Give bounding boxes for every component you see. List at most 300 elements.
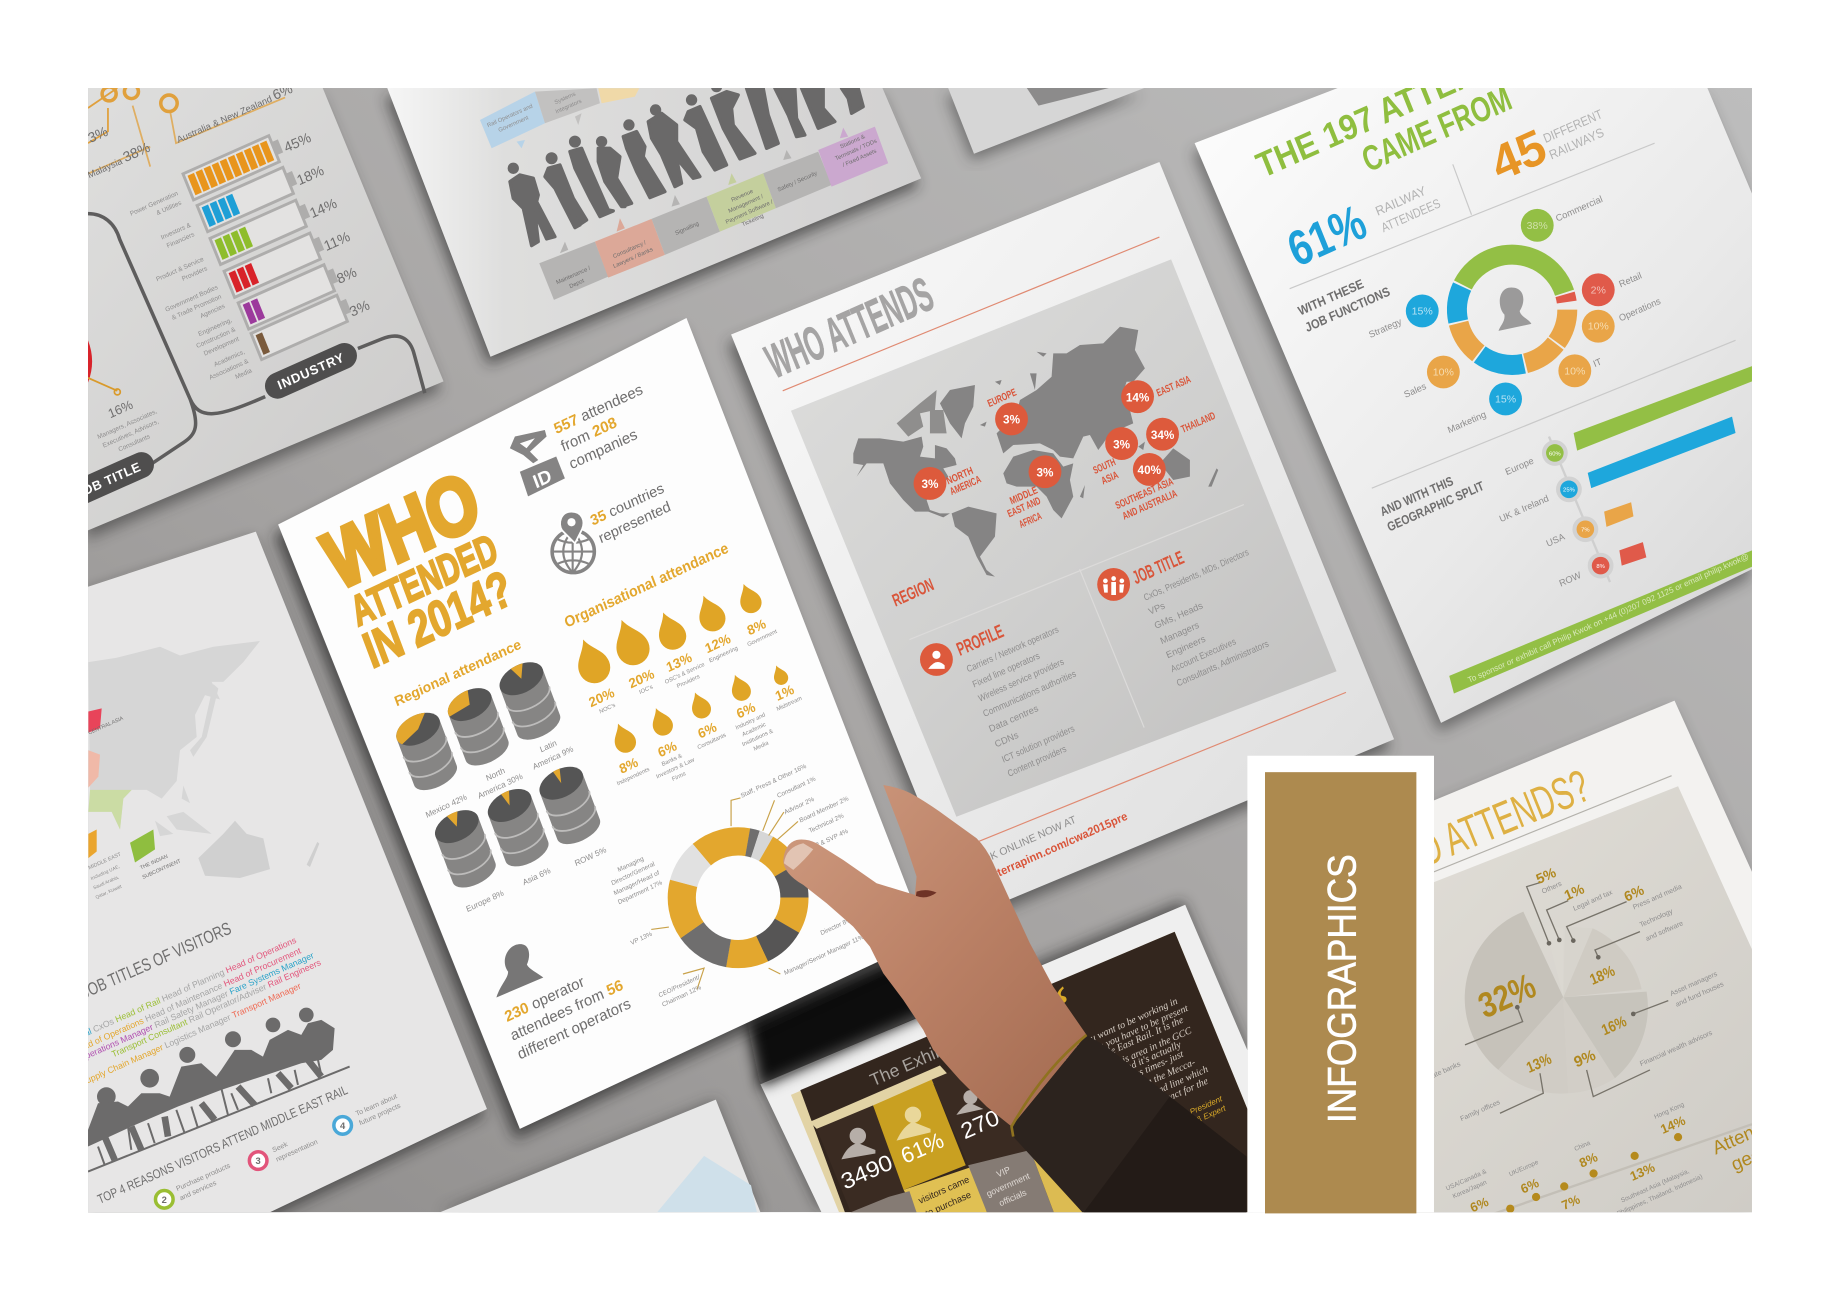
regional timeline: China bbox=[1573, 1139, 1592, 1153]
map labels: SUBCONTINENT bbox=[142, 858, 183, 881]
panel: bottom centre small page bbox=[440, 1100, 760, 1212]
red pie fragment bbox=[88, 340, 92, 383]
photo background bbox=[88, 88, 1752, 1212]
speech boxes bbox=[480, 88, 888, 300]
drop labels: Institutions & bbox=[741, 728, 774, 748]
geographic split labels: ROW bbox=[1557, 569, 1583, 589]
donut labels bbox=[611, 763, 865, 1009]
battery percentages: 18% bbox=[294, 162, 327, 188]
donut labels: Chairman 12% bbox=[661, 984, 703, 1009]
box labels: Stations & bbox=[839, 134, 866, 150]
world map bbox=[853, 327, 1218, 577]
barrel labels: Asia 6% bbox=[521, 866, 552, 887]
map region labels: ASIA bbox=[1100, 469, 1121, 487]
battery labels: Power Generation bbox=[129, 190, 179, 218]
battery 1 power generation bbox=[183, 133, 286, 200]
battery labels: Providers bbox=[181, 265, 208, 283]
donut labels: Director/General bbox=[611, 861, 656, 887]
battery 4 government bbox=[224, 230, 327, 297]
quote: If you want to be working in bbox=[1072, 996, 1179, 1052]
battery percentages bbox=[286, 133, 370, 316]
grey panel bbox=[791, 259, 1337, 817]
job title block: Managers bbox=[1158, 619, 1201, 646]
pie labels: and software bbox=[1645, 920, 1684, 943]
reason 3: 3 bbox=[256, 1156, 261, 1166]
title: ATTENDED bbox=[345, 525, 504, 635]
battery 3 product and service bbox=[210, 197, 313, 265]
coloured job titles: Head of Operations Head of Maintenance Head of Procurement bbox=[72, 945, 303, 1056]
stat columns bbox=[810, 1047, 1085, 1212]
job title block: Consultants, Administrators bbox=[1175, 637, 1270, 688]
job title block: Account Executives bbox=[1169, 635, 1238, 674]
map region labels: THAILAND bbox=[1179, 410, 1217, 436]
meeting silhouettes bbox=[88, 1008, 350, 1172]
coloured job titles: Supply Chain Manager Logistics Manager Transport Manager bbox=[79, 981, 302, 1088]
profile block: Communications authorities bbox=[981, 667, 1078, 719]
panel: silhouettes brochure page bbox=[385, 83, 921, 365]
job functions heading: JOB FUNCTIONS bbox=[1303, 284, 1392, 335]
icon: globe and pin bbox=[552, 512, 594, 573]
barrel: mexico bbox=[392, 706, 461, 796]
heading: titles of visitors: JOB TITLES OF VISITORS bbox=[78, 918, 234, 1002]
barrel: row bbox=[535, 760, 604, 850]
battery labels: Engineering, bbox=[197, 317, 233, 338]
donut labels: Staff, Press & Other 16% bbox=[740, 763, 808, 800]
people silhouettes bbox=[509, 83, 863, 246]
map markers: 40% bbox=[1138, 464, 1162, 477]
stat 557 attendees: from 208 bbox=[559, 414, 620, 456]
box labels: Payment Software / bbox=[725, 199, 774, 226]
bubbles: 15% bbox=[1495, 394, 1516, 406]
barrel labels: Europe 8% bbox=[465, 888, 505, 914]
reason 2: Purchase products bbox=[175, 1162, 232, 1193]
battery labels: Product & Service bbox=[155, 256, 205, 283]
battery labels: & Trade Promotion bbox=[171, 293, 223, 322]
regional timeline: Southeast Asia (Malaysia, bbox=[1620, 1168, 1691, 1205]
stat 557 attendees bbox=[552, 381, 646, 473]
pie chart bbox=[1465, 883, 1668, 1113]
stat 35 countries: 35 countries bbox=[588, 481, 666, 529]
hand holding the brochure bbox=[783, 785, 1087, 1127]
geographic split bars: 7% bbox=[1581, 528, 1590, 534]
battery percentages: 14% bbox=[307, 195, 339, 221]
stat 61 percent: ATTENDEES bbox=[1379, 195, 1443, 235]
pie labels: Press and media bbox=[1632, 883, 1683, 911]
quote: Medina and line which bbox=[1121, 1064, 1210, 1112]
label: gold infographics tab bbox=[1265, 772, 1416, 1213]
drop percentages: 8% bbox=[617, 754, 640, 777]
barrel: latin america bbox=[495, 656, 564, 746]
map labels: Malaysia 38% bbox=[84, 139, 153, 181]
donut labels: Consultant 1% bbox=[776, 775, 817, 800]
drops bbox=[568, 580, 790, 756]
green sponsor banner: To sponsor or exhibit call Philip Kwok on +44 (0)207 092 1125 or email philip.kwok@ bbox=[1467, 552, 1750, 685]
box labels: Lawyers / Banks bbox=[613, 247, 654, 270]
barrel labels: Latin bbox=[539, 738, 558, 754]
battery labels bbox=[129, 190, 253, 382]
label: gold infographics tab: INFOGRAPHICS bbox=[1320, 854, 1364, 1123]
pie percentages: 18% bbox=[1587, 962, 1618, 989]
map labels: MIDDLE EAST bbox=[88, 851, 123, 871]
pie percentages: 13% bbox=[1524, 1050, 1554, 1077]
map region labels bbox=[945, 373, 1217, 531]
stat 230 operators: 230 operator bbox=[502, 973, 587, 1026]
icon: persons bbox=[841, 1090, 983, 1159]
quote: & Expert bbox=[1195, 1103, 1228, 1125]
map labels: CENTRAL ASIA bbox=[88, 715, 125, 736]
box labels: Management / bbox=[728, 194, 765, 215]
map of Asia bbox=[88, 641, 319, 878]
pie percentages: 9% bbox=[1572, 1046, 1598, 1071]
regional timeline: geography bbox=[1728, 1119, 1817, 1175]
geographic split bars: 60% bbox=[1549, 451, 1561, 457]
box labels: Systems bbox=[554, 91, 577, 106]
geographic split labels: UK & Ireland bbox=[1497, 492, 1550, 524]
map region labels: SOUTH bbox=[1091, 456, 1117, 477]
map region labels: AMERICA bbox=[948, 473, 983, 498]
battery labels: Government Bodies bbox=[164, 284, 219, 314]
box labels bbox=[486, 91, 878, 290]
geographic split bars bbox=[1542, 366, 1752, 582]
quote: Vice President bbox=[1172, 1094, 1224, 1124]
bubbles: 10% bbox=[1564, 365, 1585, 377]
drop labels: Independents bbox=[616, 767, 651, 787]
box labels: Integrators bbox=[555, 99, 583, 116]
job title stat: 16% bbox=[106, 396, 135, 421]
drop percentages: 12% bbox=[703, 631, 733, 656]
region heading: REGION bbox=[889, 574, 937, 610]
box labels: Maintenance / bbox=[556, 266, 592, 286]
icon: id badge bbox=[510, 430, 565, 496]
donut labels: Director 8% bbox=[820, 916, 853, 937]
barrel labels: North bbox=[485, 766, 507, 783]
reason 4 bbox=[334, 1093, 402, 1134]
icon: id badge: ID bbox=[530, 465, 554, 492]
pie labels: Family offices bbox=[1459, 1099, 1502, 1123]
map region labels: AFRICA bbox=[1018, 510, 1044, 531]
drop labels: NOC's bbox=[599, 703, 616, 715]
drop labels: Firms bbox=[671, 771, 687, 783]
quote: it's famous times- just bbox=[1102, 1049, 1185, 1094]
job title block: JOB TITLE bbox=[1130, 547, 1187, 588]
battery 2 investors bbox=[197, 164, 300, 232]
stat 35 countries: represented bbox=[597, 499, 673, 547]
stat 61 percent: RAILWAY bbox=[1373, 183, 1428, 219]
geographic split heading: AND WITH THIS bbox=[1378, 473, 1456, 519]
bubbles: 10% bbox=[1588, 321, 1609, 333]
regional timeline bbox=[1434, 1101, 1817, 1235]
map markers: 3% bbox=[922, 478, 939, 491]
profile block: CDNs bbox=[993, 729, 1020, 749]
battery labels: Investors & bbox=[160, 222, 193, 241]
battery labels: Financiers bbox=[166, 231, 196, 250]
barrel labels: Mexico 42% bbox=[424, 793, 468, 820]
job title stat: Executives, Advisors, bbox=[102, 418, 160, 450]
quote: at Middle East Rail. It is the bbox=[1078, 1014, 1186, 1071]
quote bbox=[1037, 976, 1228, 1125]
title: WHO bbox=[313, 454, 491, 606]
bubbles: 2% bbox=[1591, 284, 1606, 296]
quote: this region you have to be present bbox=[1063, 1003, 1190, 1068]
stat 35 countries bbox=[588, 481, 673, 547]
barrel: europe bbox=[431, 804, 499, 894]
regional timeline: Hong Kong bbox=[1653, 1101, 1686, 1121]
stat 45 railways bbox=[1483, 106, 1606, 192]
geographic split labels: USA bbox=[1544, 530, 1567, 549]
stats text bbox=[837, 1105, 1032, 1219]
donut labels: Technical 2% bbox=[808, 812, 845, 835]
footer booking text: BOOK ONLINE NOW AT bbox=[967, 814, 1078, 872]
profile block: ICT solution providers bbox=[1000, 722, 1076, 765]
drop labels: Government bbox=[747, 629, 778, 648]
battery labels: & Utilities bbox=[155, 200, 183, 217]
drop percentages: 6% bbox=[734, 699, 757, 722]
map labels: Qatar, Kuwait bbox=[95, 883, 123, 900]
barrel labels bbox=[424, 738, 608, 914]
box labels: Consultancy / bbox=[612, 240, 647, 260]
map labels bbox=[88, 715, 183, 900]
profile block: Fixed line operators bbox=[971, 650, 1041, 690]
map labels: Saudi Arabia, bbox=[92, 874, 120, 890]
donut labels: Board Member 2% bbox=[799, 795, 850, 824]
drop labels: Consultants bbox=[697, 733, 727, 751]
sleeve cuff bbox=[1012, 1035, 1247, 1213]
bubble labels: IT bbox=[1591, 355, 1603, 369]
box labels: Government bbox=[498, 115, 530, 134]
map markers: 14% bbox=[1126, 391, 1150, 404]
map labels: 3% bbox=[85, 123, 111, 146]
regional timeline: Attendees bbox=[1709, 1105, 1794, 1158]
bubble labels: Marketing bbox=[1446, 408, 1488, 435]
profile block: Data centres bbox=[987, 702, 1040, 734]
box labels: Signalling bbox=[675, 221, 700, 237]
pill: job title: JOB TITLE bbox=[73, 459, 143, 501]
map labels bbox=[88, 88, 292, 178]
reason 3: Seek bbox=[272, 1141, 289, 1154]
bubble labels: Strategy bbox=[1367, 315, 1403, 340]
pie percentages: 16% bbox=[1599, 1013, 1629, 1039]
regional timeline: USA/Canada & bbox=[1445, 1168, 1488, 1192]
icon: operator person bbox=[496, 944, 543, 997]
heading: attendees came from: CAME FROM bbox=[1357, 79, 1517, 180]
quote: and it's actually bbox=[1121, 1039, 1183, 1075]
battery 6 academics bbox=[251, 292, 354, 360]
barrel: north america bbox=[444, 681, 512, 772]
job title block: GMs, Heads bbox=[1152, 599, 1205, 631]
drop labels: OSC's & Service bbox=[664, 662, 706, 686]
battery labels: Construction & bbox=[195, 326, 237, 350]
regional timeline: 6% bbox=[1468, 1194, 1491, 1215]
drop percentages: 6% bbox=[656, 738, 679, 760]
profile block: PROFILE bbox=[954, 620, 1006, 660]
donut labels: Advisor 2% bbox=[783, 796, 816, 816]
stats text: government bbox=[985, 1170, 1032, 1199]
drop percentages: 13% bbox=[664, 650, 694, 675]
box labels: Rail Operators and bbox=[486, 104, 534, 129]
geographic split bars: 25% bbox=[1563, 488, 1575, 494]
battery percentages: 11% bbox=[321, 228, 353, 254]
stat 45 railways: RAILWAYS bbox=[1547, 124, 1606, 162]
quote: biggest show in this area in the GCC bbox=[1055, 1025, 1194, 1095]
donut labels: CEO/President/ bbox=[658, 974, 701, 999]
stat 230 operators: attendees from 56 bbox=[508, 977, 626, 1045]
map region labels: EAST AND bbox=[1006, 495, 1043, 520]
bubbles: 10% bbox=[1433, 367, 1454, 379]
drop percentages: 8% bbox=[745, 616, 768, 638]
job title block bbox=[1097, 546, 1270, 688]
label: white frame bbox=[1247, 756, 1434, 1212]
quote: the contract for the bbox=[1136, 1075, 1210, 1117]
donut labels: Managing bbox=[617, 855, 645, 874]
box labels: Terminals / TODs bbox=[835, 138, 878, 162]
pie labels: Legal and tax bbox=[1572, 889, 1614, 913]
bubbles bbox=[1406, 209, 1615, 415]
stats text: 61% bbox=[897, 1127, 948, 1169]
battery labels: Associations & bbox=[208, 358, 250, 382]
reason 4: To learn about bbox=[355, 1093, 398, 1118]
bubble labels: Sales bbox=[1402, 380, 1428, 400]
stats text: 270 bbox=[957, 1105, 1003, 1144]
quote: “ bbox=[1037, 976, 1082, 1039]
map region labels: NORTH bbox=[945, 465, 975, 487]
map region labels: AND AUSTRALIA bbox=[1121, 488, 1179, 523]
job title stat: Managers, Associates, bbox=[96, 408, 158, 441]
donut labels: Manager/Head of bbox=[613, 870, 661, 897]
panel: small top brochure page bbox=[946, 88, 1144, 161]
pie percentages: 1% bbox=[1562, 880, 1587, 903]
profile block: Content providers bbox=[1006, 743, 1068, 779]
coloured job titles: Operations Manager Rail Safety Manager Fare Systems Manager bbox=[77, 950, 315, 1064]
battery labels: Development bbox=[203, 336, 240, 358]
battery labels: Agencies bbox=[199, 303, 226, 320]
pill: job title bbox=[88, 452, 154, 503]
reason 4: future projects bbox=[358, 1102, 402, 1127]
job title block: CxOs, Presidents, MDs, Directors bbox=[1142, 546, 1250, 603]
pie labels: Financial wealth advisors bbox=[1639, 1029, 1714, 1068]
map markers: 3% bbox=[1037, 466, 1054, 479]
map region labels: SOUTHEAST ASIA bbox=[1114, 476, 1175, 512]
heading: who attends: WHO ATTENDS bbox=[758, 267, 941, 389]
pie percentages: 6% bbox=[1622, 881, 1647, 905]
panel: who attends beige brochure page bbox=[1347, 701, 1817, 1235]
regional timeline: 8% bbox=[1577, 1149, 1600, 1171]
drop percentages: 20% bbox=[627, 666, 656, 691]
drop labels bbox=[599, 629, 803, 787]
coloured job titles: General CxOs Head of Rail Head of Planning Head of Operations bbox=[61, 935, 298, 1048]
drop labels: Media bbox=[753, 740, 770, 753]
title bbox=[313, 454, 519, 679]
geographic split bars: 8% bbox=[1596, 564, 1605, 570]
title: the exhibition: The Exhibition bbox=[867, 1026, 976, 1090]
pie percentages: 32% bbox=[1473, 966, 1541, 1026]
reason 2 bbox=[155, 1162, 232, 1208]
stat 557 attendees: companies bbox=[567, 426, 640, 473]
drop labels: Industry and bbox=[735, 712, 766, 732]
bubble labels: Retail bbox=[1617, 269, 1643, 289]
reason 2: 2 bbox=[162, 1195, 167, 1205]
pie percentages: 5% bbox=[1534, 864, 1559, 887]
regional timeline: 7% bbox=[1559, 1191, 1583, 1213]
donut labels: Manager/Senior Manager 11% bbox=[783, 933, 865, 977]
pill: industry: INDUSTRY bbox=[275, 349, 347, 393]
job title donut chart bbox=[659, 818, 817, 977]
regional timeline: Korea/Japan bbox=[1452, 1179, 1488, 1200]
stats text: to purchase bbox=[924, 1189, 973, 1219]
box labels: Revenue bbox=[731, 189, 754, 204]
map region labels: MIDDLE bbox=[1008, 484, 1039, 507]
icon: person in donut bbox=[1499, 288, 1531, 331]
drop labels: Providers bbox=[676, 674, 701, 690]
bubbles: 38% bbox=[1527, 220, 1548, 232]
bubble labels: Operations bbox=[1617, 295, 1662, 323]
bubbles: 15% bbox=[1412, 305, 1433, 317]
battery percentages: 8% bbox=[334, 263, 359, 287]
battery percentages: 45% bbox=[281, 129, 314, 155]
stat 230 operators: different operators bbox=[515, 995, 633, 1063]
donut leader lines bbox=[651, 798, 798, 989]
battery labels: Academics, bbox=[213, 349, 246, 369]
box labels: / Fixed Assets bbox=[842, 148, 878, 169]
drop labels: Academic bbox=[741, 722, 767, 738]
box labels: Ticketing bbox=[741, 213, 765, 228]
footer booking text: www.terrapinn.com/cwa2015pre bbox=[968, 810, 1130, 892]
barrel labels: America 30% bbox=[477, 772, 524, 801]
battery percentages: 3% bbox=[347, 296, 372, 320]
regional timeline: 6% bbox=[1518, 1175, 1542, 1197]
donut labels: VP & SVP 4% bbox=[810, 828, 849, 851]
heading: organisational attendance: Organisational attendance bbox=[562, 540, 731, 632]
map markers bbox=[914, 380, 1179, 500]
quote: on the Mecca- bbox=[1141, 1057, 1197, 1090]
coloured job titles: Transport Consultant Rail Operator/Adviser Rail Engineers bbox=[110, 957, 323, 1059]
stat 230 operators bbox=[502, 973, 633, 1063]
panel: who attended in 2014 main page bbox=[273, 318, 927, 1139]
box labels: Depot bbox=[569, 278, 586, 290]
battery 5 engineering bbox=[238, 262, 341, 329]
panel: 197 attendees brochure page bbox=[1192, 18, 1752, 732]
pie labels: Others bbox=[1541, 880, 1563, 896]
bubble labels: Commercial bbox=[1554, 193, 1604, 224]
pill: industry bbox=[265, 343, 357, 399]
panel: exhibition brochure page bbox=[746, 900, 1247, 1219]
heading: attends: WHO ATTENDS? bbox=[1363, 760, 1596, 895]
profile block: Wireless service providers bbox=[976, 656, 1066, 704]
stat 45 railways: DIFFERENT bbox=[1541, 106, 1605, 146]
job title stat bbox=[97, 400, 159, 451]
map markers: 3% bbox=[1113, 438, 1131, 451]
barrel labels: ROW 5% bbox=[573, 845, 608, 868]
drop labels: Banks & bbox=[661, 753, 683, 768]
panel: who attends brochure page bbox=[728, 162, 1394, 927]
barrel labels: America 9% bbox=[531, 745, 575, 772]
cable connector bbox=[88, 214, 425, 467]
map markers: 34% bbox=[1151, 429, 1175, 442]
drop percentages: 6% bbox=[696, 719, 719, 742]
stat 557 attendees: 557 attendees bbox=[552, 381, 646, 438]
battery labels: Media bbox=[234, 367, 253, 381]
bubble labels bbox=[1367, 193, 1662, 435]
pie labels: Technology bbox=[1639, 908, 1674, 929]
geographic split heading: GEOGRAPHIC SPLIT bbox=[1385, 478, 1486, 534]
drop labels: IOC's bbox=[639, 684, 654, 696]
stats text: officials bbox=[998, 1187, 1028, 1208]
reason 4: 4 bbox=[340, 1121, 346, 1131]
stat 61 percent: 61% bbox=[1280, 194, 1374, 278]
job functions heading: WITH THESE bbox=[1296, 276, 1366, 318]
drop labels: Midstream bbox=[776, 696, 803, 713]
job title block: Engineers bbox=[1164, 633, 1207, 660]
box labels: Safety / Security bbox=[777, 171, 818, 194]
